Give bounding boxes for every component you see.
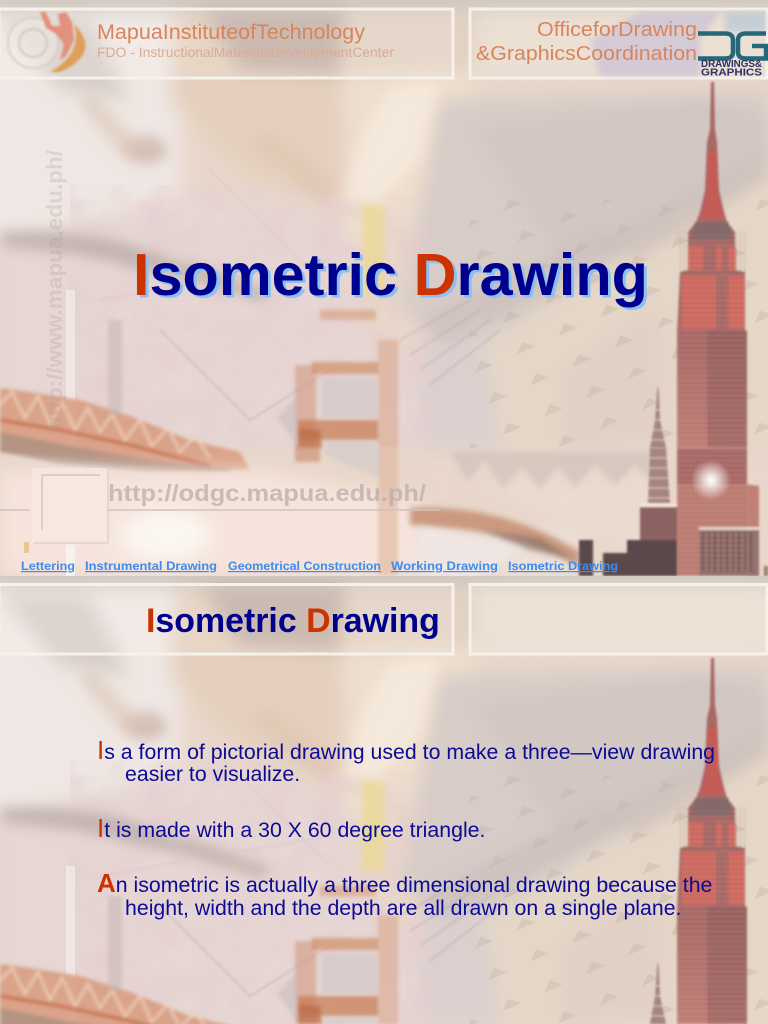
main title: Isometric Drawing	[133, 241, 648, 308]
office name line 2: &GraphicsCoordination	[476, 43, 697, 65]
slide 1 right header panel	[470, 9, 767, 78]
slide 2 left header panel	[0, 584, 453, 654]
navigation links: Lettering	[21, 559, 75, 573]
slide 2 heading: Isometric Drawing	[146, 602, 440, 640]
navigation links	[21, 559, 618, 573]
paragraph 1: Is a form of pictorial drawing used to make a three—view drawing	[97, 735, 715, 765]
icon: DG logo: GRAPHICS	[701, 66, 762, 78]
slide 2 right header panel	[470, 584, 767, 654]
navigation links: Geometrical Construction	[228, 559, 381, 573]
Chrysler Building lower	[648, 448, 670, 503]
institute subtitle: FDO - InstructionalMaterialsDevelopmentCenter	[97, 44, 394, 60]
icon: DG logo	[698, 12, 766, 78]
icon: institute seal and figure	[8, 12, 85, 72]
body text: height, width and the depth are all drawn on a single plane.	[125, 896, 681, 920]
paragraph 2: It is made with a 30 X 60 degree triangle.	[97, 813, 485, 843]
Empire State Building lower	[579, 448, 768, 576]
watermark purple disc	[590, 12, 720, 76]
body text: easier to visualize.	[125, 762, 300, 786]
watermark website url: http://odgc.mapua.edu.ph/	[108, 480, 427, 506]
icon: DG logo: DRAWINGS&	[701, 58, 762, 70]
slide 1 background	[0, 0, 768, 576]
vertical watermark url: http://www.mapua.edu.ph/	[42, 150, 67, 430]
slide 1 lower scene	[0, 446, 768, 576]
navigation links: Instrumental Drawing	[85, 559, 217, 573]
serrated teeth	[450, 452, 650, 490]
logo watermark lines	[0, 468, 440, 576]
navigation links: Isometric Drawing	[508, 559, 618, 573]
navigation links: Working Drawing	[391, 559, 498, 573]
slide 2 background	[0, 556, 768, 1024]
institute name: MapuaInstituteofTechnology	[97, 21, 366, 44]
body text	[97, 735, 715, 920]
paragraph 3: An isometric is actually a three dimensional drawing because the	[97, 868, 712, 898]
office name line 1: OfficeforDrawing	[537, 19, 697, 41]
main title: Isometric Drawing	[136, 244, 651, 310]
slide 1 left header panel	[0, 9, 453, 78]
